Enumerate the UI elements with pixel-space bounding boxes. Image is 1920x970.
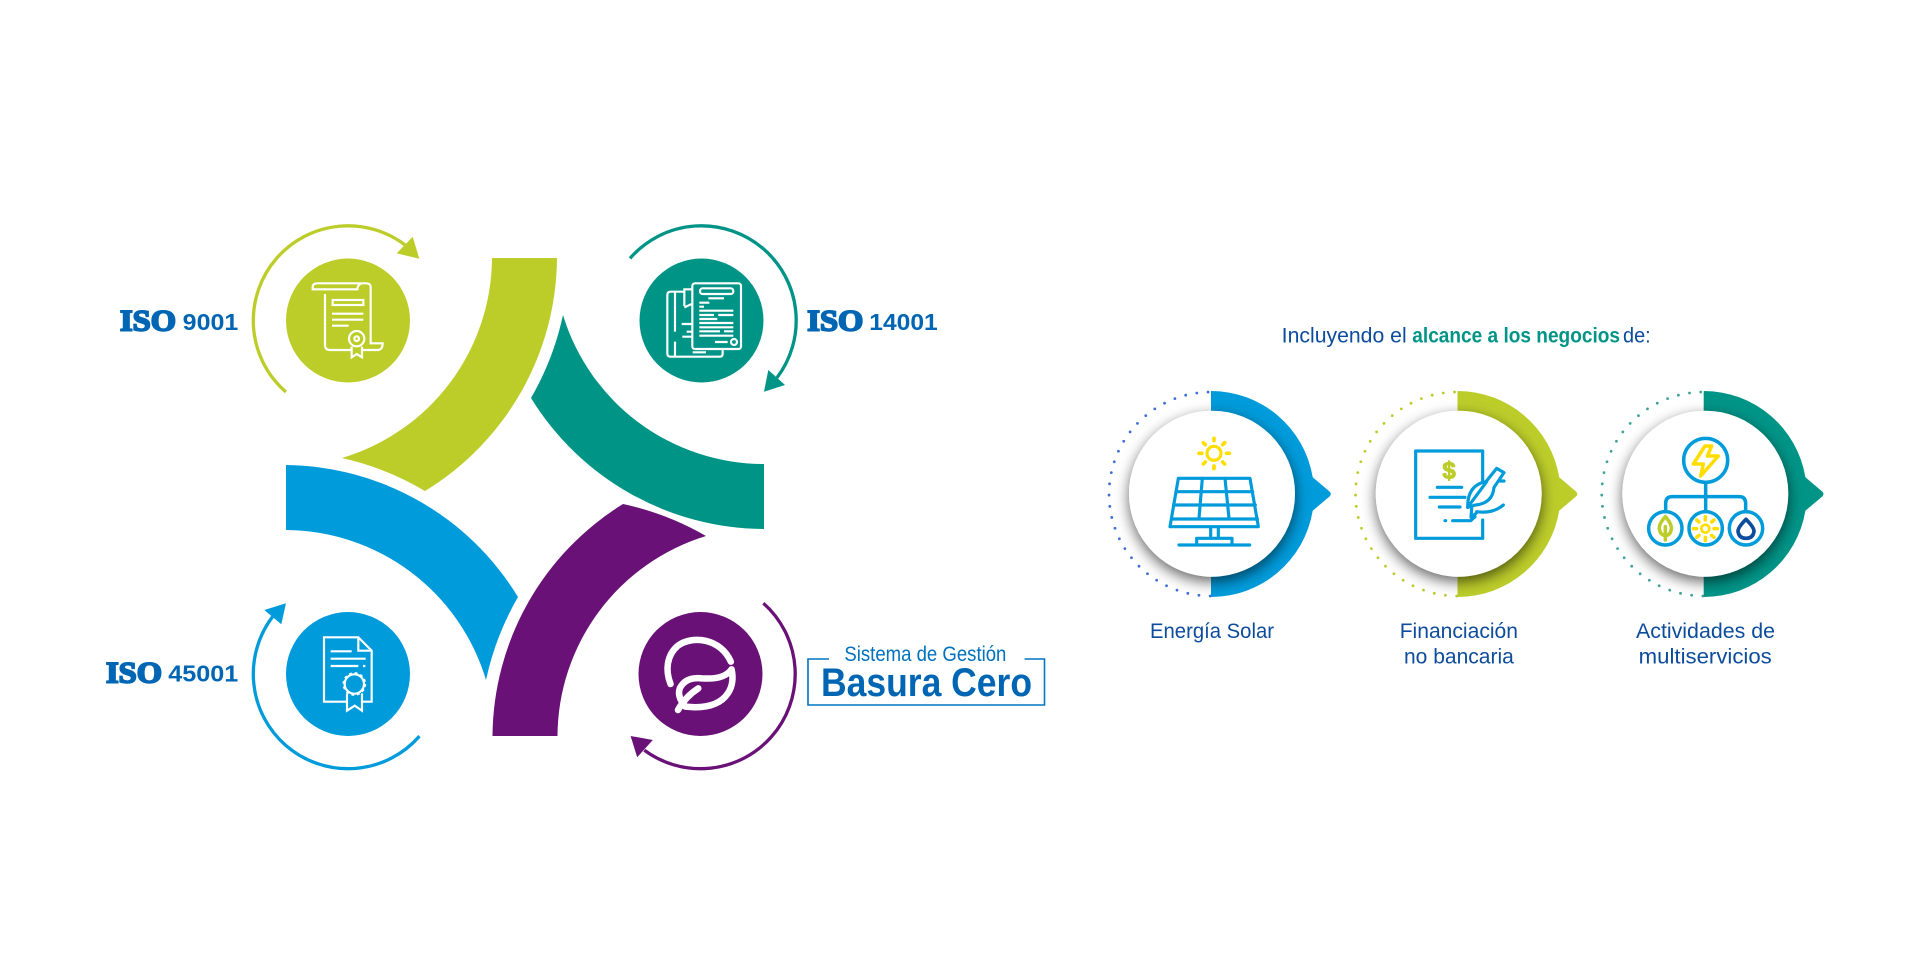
circular arrow: blue [214, 540, 482, 808]
heading: scope: Incluyendo el [1282, 325, 1407, 348]
arc: lime [342, 258, 557, 491]
heading: scope [1282, 325, 1651, 348]
logo: Sistema de Gestión Basura Cero: Sistema de Gestión [844, 643, 1006, 666]
label: ISO 9001 [120, 305, 239, 338]
circular arrow: purple [567, 540, 834, 808]
icon: document with seal [324, 637, 372, 711]
icon: signed document: $ [1442, 458, 1456, 485]
half ring with pointer: blue [1211, 391, 1331, 597]
badge circle: purple [638, 612, 762, 736]
label: ISO 45001: ISO [106, 657, 162, 690]
panel: Basura Cero [567, 540, 1044, 808]
panel: central cycle of four arcs [286, 258, 764, 736]
label: ISO 45001: 45001 [168, 661, 239, 687]
logo: Sistema de Gestión Basura Cero [808, 643, 1044, 705]
label: Energía Solar: Energía Solar [1150, 620, 1274, 643]
half ring with pointer: teal [1704, 391, 1823, 597]
panel: Actividades de multiservicios [1602, 391, 1823, 668]
arc: blue [286, 465, 518, 680]
panel: ISO 45001 [106, 540, 482, 808]
circular arrow: lime [214, 187, 482, 454]
white disc [1622, 411, 1788, 577]
label: ISO 9001: 9001 [183, 309, 239, 335]
label: Actividades de multiservicios: multiservicios [1639, 645, 1772, 668]
panel: ISO 9001 [120, 187, 482, 454]
icon: stacked documents [667, 283, 741, 357]
circular arrow: teal [568, 187, 835, 454]
label: ISO 14001 [807, 305, 938, 338]
half ring with pointer: lime [1458, 391, 1577, 597]
icon: scroll certificate [313, 283, 383, 357]
label: ISO 45001 [106, 657, 239, 690]
logo: Sistema de Gestión Basura Cero: Basura Cero [821, 661, 1032, 705]
label: Financiación no bancaria: no bancaria [1404, 645, 1514, 668]
label: Financiación no bancaria [1400, 620, 1518, 668]
label: ISO 14001: 14001 [869, 309, 938, 335]
white disc [1376, 411, 1542, 577]
icon: solar panel [1170, 438, 1258, 545]
dotted half ring [1356, 392, 1458, 596]
label: ISO 14001: ISO [807, 305, 863, 338]
heading: scope: alcance a los negocios [1412, 325, 1620, 348]
panel: Energía Solar [1109, 391, 1331, 643]
badge circle: teal [640, 258, 764, 382]
label: Actividades de multiservicios: Actividades de [1636, 620, 1775, 643]
arc: purple [492, 504, 706, 736]
label: Actividades de multiservicios [1636, 620, 1775, 668]
label: ISO 9001: ISO [120, 305, 176, 338]
arc: teal [531, 315, 764, 529]
heading: scope: de: [1623, 325, 1651, 348]
icon: leaf in circle [668, 640, 733, 710]
label: Financiación no bancaria: Financiación [1400, 620, 1518, 643]
panel: Financiación no bancaria [1356, 391, 1577, 668]
panel: ISO 14001 [568, 187, 938, 454]
dotted half ring [1602, 392, 1704, 596]
badge circle: blue [286, 612, 410, 736]
dotted half ring [1109, 392, 1211, 596]
badge circle: lime [286, 258, 410, 382]
icon: signed document [1416, 451, 1504, 538]
white disc [1129, 411, 1295, 577]
icon: energy tree [1649, 438, 1763, 545]
